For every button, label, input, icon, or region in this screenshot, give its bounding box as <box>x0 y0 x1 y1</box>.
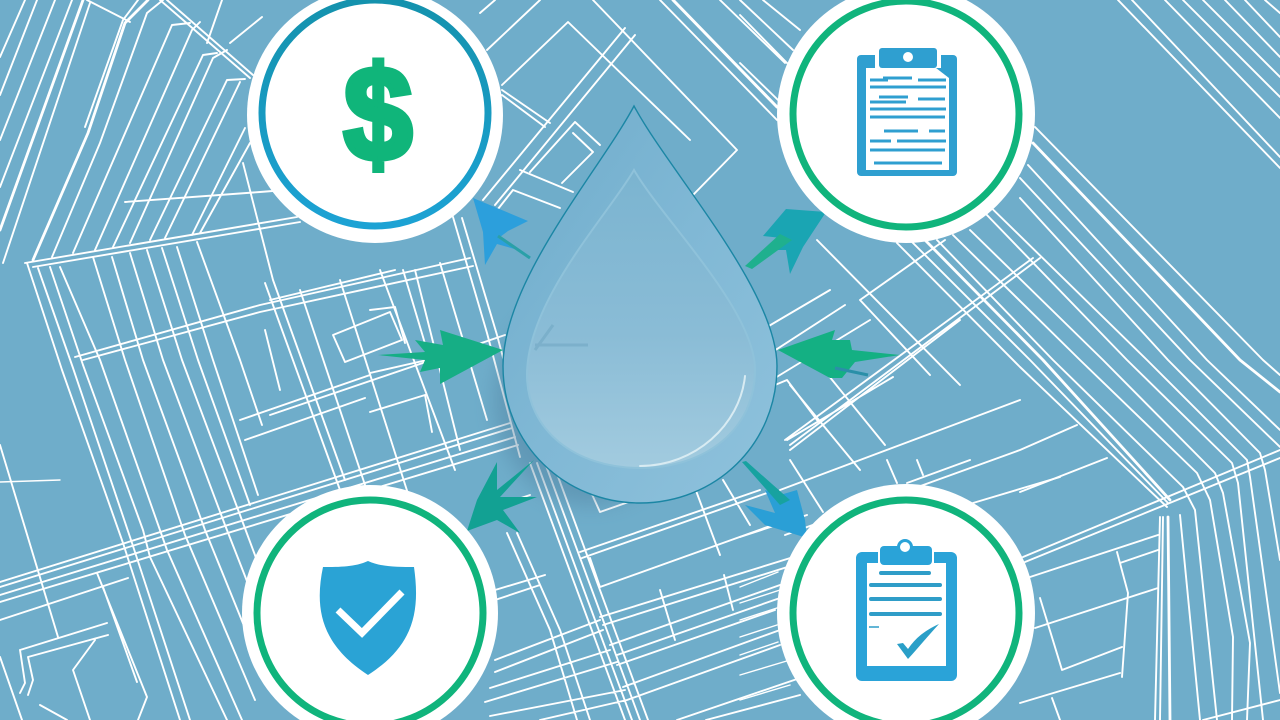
drop shadow behind water drop <box>495 295 685 505</box>
panel: document circle <box>777 0 1035 243</box>
arrow: green from left into drop <box>378 330 503 384</box>
drop outer body <box>503 106 777 503</box>
arrow: blue toward dollar circle <box>473 198 530 265</box>
arrow: blue toward checklist circle <box>742 461 807 538</box>
drop inner lens <box>527 170 755 468</box>
icon: clipboard document <box>857 46 957 176</box>
arrow: teal toward shield circle <box>467 460 537 533</box>
arrow: teal toward document circle <box>745 209 826 274</box>
icon: shield with check <box>320 561 416 675</box>
panel: shield circle <box>242 485 498 720</box>
water drop <box>503 106 777 503</box>
icon: clipboard with check <box>856 539 957 681</box>
drop reflection <box>535 325 588 350</box>
panel: checklist circle <box>777 484 1035 720</box>
panel: dollar circle <box>247 0 503 243</box>
drop highlight <box>640 376 745 466</box>
arrow: green from right into drop <box>778 330 900 378</box>
icon: dollar sign: $ <box>344 39 412 189</box>
